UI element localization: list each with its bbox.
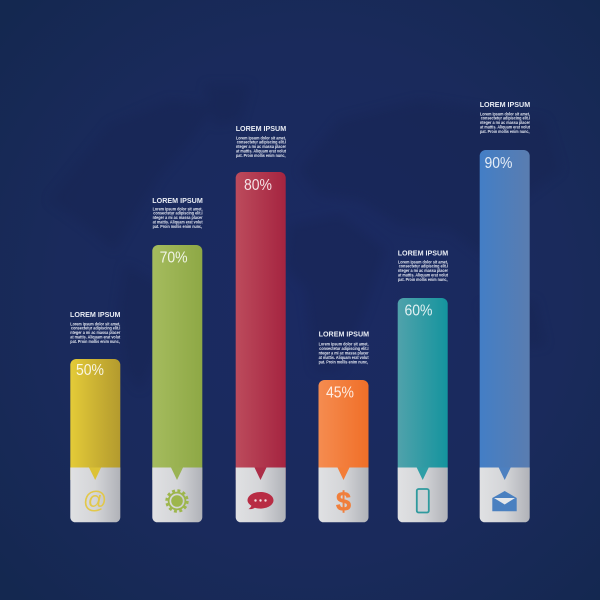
column 3 — [236, 172, 286, 480]
text block 1: Lorem ipsum dolor sit amet, — [70, 321, 120, 326]
column 6 — [480, 150, 530, 480]
text block 2 — [153, 206, 203, 229]
text block 4: pat. Proin mollis enim nunc, — [319, 359, 368, 364]
text block 3: pat. Proin mollis enim nunc, — [236, 153, 286, 158]
pointer 4 — [338, 468, 350, 480]
text block 2: Lorem ipsum dolor sit amet, — [153, 206, 203, 211]
heading 3: LOREM IPSUM — [236, 124, 286, 133]
column 4 — [318, 380, 368, 480]
pointer 3 — [254, 468, 266, 480]
icon: gear — [167, 491, 187, 511]
base 5 — [398, 468, 448, 522]
text block 6: Lorem ipsum dolor sit amet, — [480, 111, 530, 116]
bar 1: 50% yellow — [70, 310, 121, 522]
text block 5: nteger a mi ac massa placer — [398, 268, 448, 273]
text block 4: nteger a mi ac massa placer — [319, 350, 369, 356]
value 3: 80% — [244, 177, 272, 194]
text block 1: consectetur adipiscing elit.I — [71, 326, 120, 331]
heading 2: LOREM IPSUM — [152, 196, 203, 205]
heading 1: LOREM IPSUM — [70, 310, 120, 319]
column 2 — [152, 245, 202, 480]
column 5 — [398, 298, 448, 480]
icon: envelope — [492, 491, 517, 511]
text block 5: Lorem ipsum dolor sit amet, — [398, 259, 448, 264]
base 4 — [318, 468, 369, 522]
text block 2: nteger a mi ac massa placer — [153, 215, 203, 220]
text block 6: at mattis. Aliquam erat volut — [480, 125, 531, 130]
column 1 — [70, 359, 120, 480]
bar 2: 70% green — [152, 196, 203, 522]
pointer 2 — [171, 468, 183, 480]
text block 4: at mattis. Aliquam erat volut — [319, 355, 369, 360]
text block 1: at mattis. Aliquam erat volut — [70, 335, 121, 340]
text block 4 — [319, 342, 369, 364]
text block 1: pat. Proin mollis enim nunc, — [70, 339, 120, 344]
base 3 — [236, 468, 286, 522]
icon: dollar sign: $ — [336, 486, 351, 516]
base 1 — [70, 468, 120, 522]
world map silhouette — [50, 85, 560, 390]
bar 6: 90% blue — [480, 100, 531, 522]
heading 5: LOREM IPSUM — [398, 248, 448, 258]
bar 5: 60% teal — [398, 248, 449, 522]
text block 3: Lorem ipsum dolor sit amet, — [236, 135, 286, 140]
text block 5: consectetur adipiscing elit.I — [399, 264, 448, 269]
text block 3: at mattis. Aliquam erat volut — [236, 149, 287, 154]
pointer 5 — [417, 468, 429, 480]
text block 1: nteger a mi ac massa placer — [70, 330, 121, 335]
text block 3 — [236, 135, 287, 158]
pointer 1 — [89, 468, 101, 480]
heading 4: LOREM IPSUM — [319, 330, 369, 339]
text block 6: pat. Proin mollis enim nunc, — [480, 129, 530, 134]
pointer 6 — [499, 468, 511, 480]
text block 5 — [398, 259, 449, 282]
text block 2: consectetur adipiscing elit.I — [153, 211, 203, 216]
text block 1 — [70, 321, 121, 344]
text block 6: consectetur adipiscing elit.I — [481, 116, 530, 121]
base 6 — [480, 468, 530, 522]
text block 2: at mattis. Aliquam erat volut — [153, 220, 203, 225]
text block 3: nteger a mi ac massa placer — [236, 144, 286, 149]
text block 3: consectetur adipiscing elit.I — [237, 140, 286, 145]
bar 3: 80% red — [236, 124, 287, 522]
text block 4: Lorem ipsum dolor sit amet, — [319, 342, 369, 347]
text block 5: at mattis. Aliquam erat volut — [398, 273, 449, 278]
text block 6 — [480, 111, 531, 134]
value 2: 70% — [160, 250, 188, 266]
value 1: 50% — [76, 362, 104, 379]
icon: phone — [417, 489, 429, 512]
icon: at sign: @ — [83, 487, 107, 514]
icon: speech bubble — [248, 492, 274, 509]
value 5: 60% — [404, 302, 433, 320]
heading 6: LOREM IPSUM — [480, 100, 530, 109]
base 2 — [152, 468, 202, 522]
text block 5: pat. Proin mollis enim nunc, — [398, 277, 448, 282]
text block 4: consectetur adipiscing elit.I — [319, 346, 369, 351]
value 4: 45% — [326, 384, 354, 402]
text block 6: nteger a mi ac massa placer — [480, 120, 530, 125]
bar 4: 45% orange — [318, 330, 369, 522]
value 6: 90% — [484, 155, 513, 172]
text block 2: pat. Proin mollis enim nunc, — [153, 224, 202, 229]
